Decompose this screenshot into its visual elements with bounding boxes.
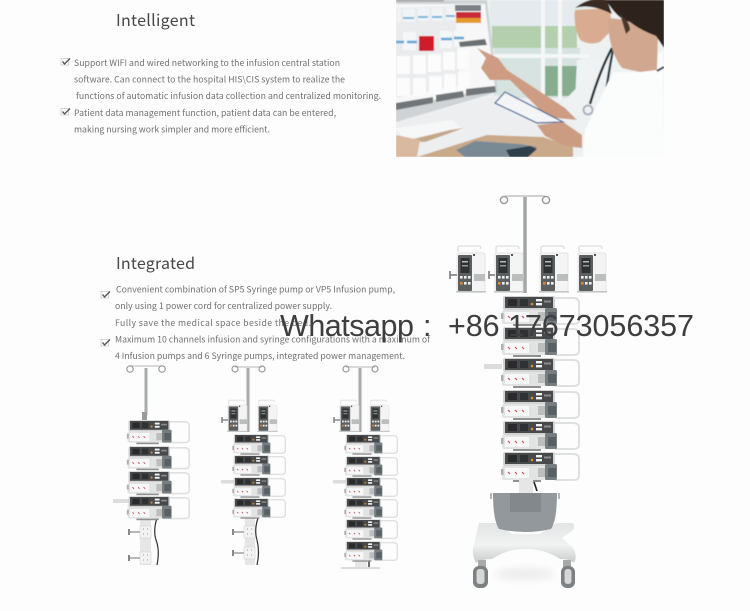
IV pole	[500, 196, 550, 293]
watermark: Whatsapp contact: +86 17673056357	[448, 309, 694, 343]
feature line 2: software. Can connect to the hospital HIS\CIS system to realize the	[74, 72, 345, 86]
integrated line 1: Convenient combination of SP5 Syringe pump or VP5 Infusion pump,	[116, 282, 395, 296]
window view	[490, 0, 590, 28]
heading: Intelligent: Intelligent	[116, 7, 195, 31]
watermark: Whatsapp contact: :	[423, 309, 431, 343]
integrated line 5: 4 Infusion pumps and 6 Syringe pumps, integrated power management.	[115, 349, 405, 362]
watermark: Whatsapp contact: Whatsapp	[280, 309, 414, 343]
icon: check 2	[61, 108, 70, 115]
monitor	[396, 0, 498, 122]
man doctor	[583, 50, 664, 157]
monitor side panel	[455, 5, 481, 11]
large trolley with pumps	[450, 196, 607, 588]
feature line 5: making nursing work simpler and more efficient.	[74, 122, 270, 136]
arm and hand	[477, 48, 577, 120]
heading: Integrated: Integrated	[116, 250, 195, 274]
integrated line 2: only using 1 power cord for centralized power supply.	[115, 299, 332, 312]
small stack 2: two infusion and four syringe pumps	[221, 366, 285, 565]
integrated line 3: Fully save the medical space beside the bed.	[115, 316, 311, 329]
monitor tiles	[396, 6, 460, 98]
watermark: Whatsapp contact	[280, 309, 694, 343]
icon: check 1	[61, 58, 70, 65]
icon: check 3	[101, 292, 110, 298]
syringe pumps column	[484, 296, 579, 482]
feature line 4: Patient data management function, patient data can be entered,	[74, 106, 336, 119]
woman doctor	[568, 88, 576, 98]
integrated line 4: Maximum 10 channels infusion and syringe configurations with a maximum of	[115, 332, 431, 346]
photo: doctors at monitor	[396, 0, 664, 157]
small stack 1: four syringe pumps	[113, 366, 189, 565]
feature line 3: functions of automatic infusion data collection and centralized monitoring.	[76, 89, 381, 102]
icon: check 4	[101, 340, 110, 346]
clipboard	[495, 92, 563, 123]
monitor stand and desk	[494, 95, 500, 98]
text block: integrated features	[101, 282, 431, 362]
infusion pumps row	[450, 246, 607, 293]
text block: intelligent features	[61, 56, 381, 136]
small stack 3: two infusion and six syringe pumps	[333, 366, 397, 568]
trolley base	[473, 479, 576, 588]
feature line 1: Support WIFI and wired networking to the infusion central station	[74, 56, 340, 69]
